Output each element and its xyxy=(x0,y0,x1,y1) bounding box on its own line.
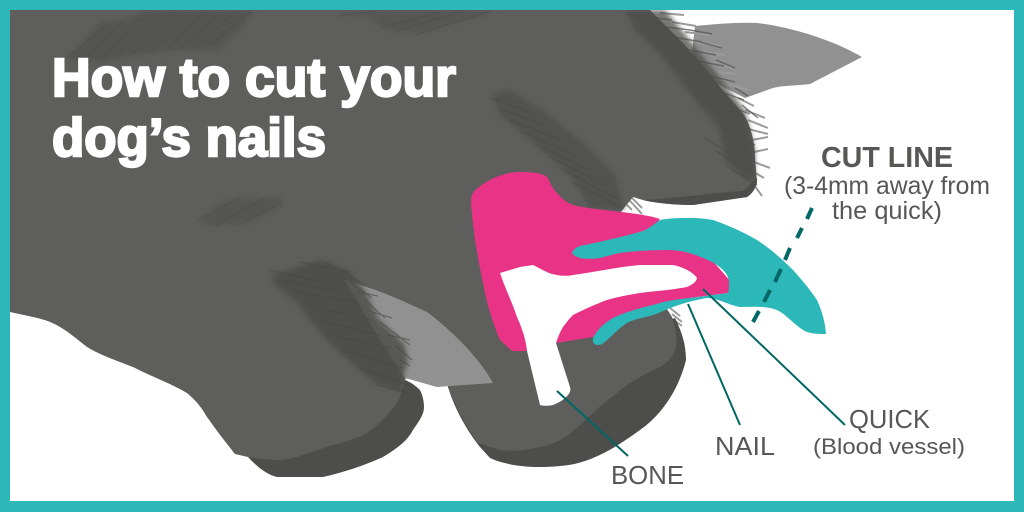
upper toe shadow xyxy=(643,178,757,205)
bone leader line xyxy=(557,391,628,456)
quick leader line xyxy=(703,289,845,425)
paw body xyxy=(10,10,757,460)
label: cut line: the quick) xyxy=(832,197,942,225)
fur tuft: right edge of upper toe xyxy=(625,10,758,185)
teal nail shell xyxy=(572,218,826,345)
nail of left toe xyxy=(345,280,493,387)
title xyxy=(52,48,456,168)
fur tuft: above pink xyxy=(490,90,625,210)
fur tuft: top left xyxy=(65,10,255,64)
label: nail: NAIL xyxy=(715,431,775,461)
title: How to cut your xyxy=(52,48,456,108)
illustration: dog paw xyxy=(10,10,862,477)
light fur behind upper toe xyxy=(612,13,770,326)
label: quick: QUICK xyxy=(849,404,931,434)
nail leader line xyxy=(688,304,740,425)
label: bone: BONE xyxy=(611,460,684,490)
dark lower toe pad xyxy=(448,318,686,467)
anatomy: nail cross-section xyxy=(471,172,826,406)
dark left toe pad xyxy=(248,380,424,477)
label: cut line: CUT LINE xyxy=(821,142,953,174)
nail of upper toe xyxy=(690,23,862,98)
white bone xyxy=(500,265,697,406)
title: dog’s nails xyxy=(52,108,326,168)
label: quick: (Blood vessel) xyxy=(813,434,965,459)
label: quick xyxy=(813,404,965,459)
label: cut line: (3-4mm away from xyxy=(784,172,990,200)
cut line xyxy=(753,208,812,322)
label: cut line xyxy=(784,142,990,225)
pink nail base xyxy=(471,172,732,351)
fur tuft: top centre xyxy=(335,10,495,35)
fur tuft: left toe xyxy=(270,260,412,394)
fur tuft: small centre xyxy=(198,197,283,226)
